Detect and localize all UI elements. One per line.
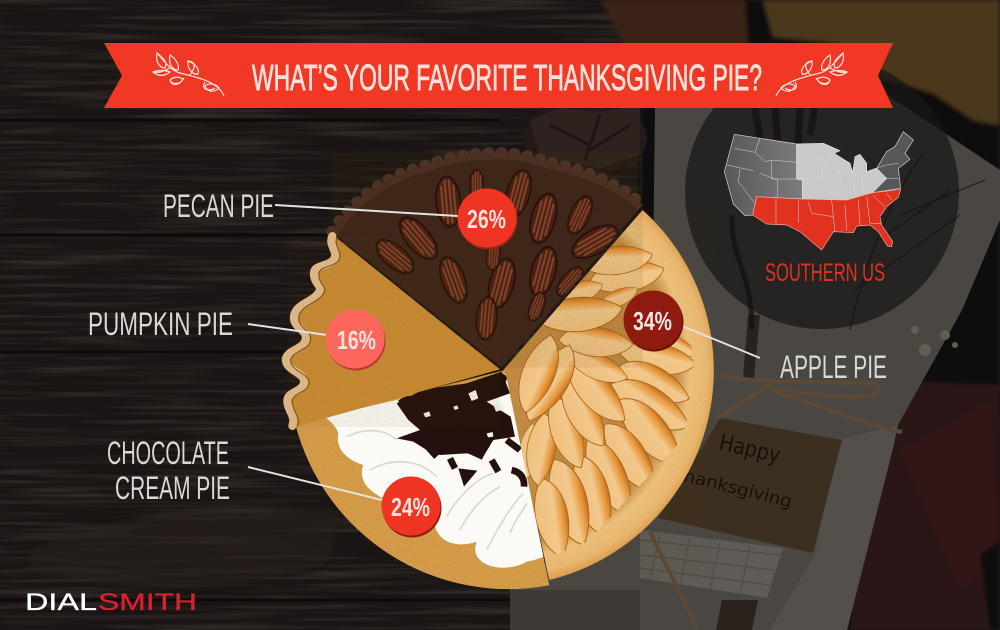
twine bow <box>650 375 902 628</box>
gift tag: Thanksgiving <box>670 463 794 512</box>
fork and dried flowers <box>732 108 985 330</box>
badge: 34%: 34% <box>633 306 672 336</box>
badge: 24%: 24% <box>391 492 430 522</box>
badge: 26%: 26% <box>467 204 506 234</box>
map label: SOUTHERN US <box>765 259 885 287</box>
stick <box>716 315 760 630</box>
label: pecan pie: PECAN PIE <box>163 188 274 224</box>
label: chocolate cream pie: CHOCOLATE <box>107 435 229 471</box>
pie graphic <box>286 153 714 589</box>
whipped cream <box>325 373 557 568</box>
southern region <box>753 189 901 250</box>
dark circle <box>685 55 959 329</box>
northeast region <box>873 132 913 193</box>
badge: 16%: 16% <box>337 325 376 355</box>
badge: 16% <box>326 310 386 370</box>
gift tag: Happy <box>717 430 783 469</box>
label: chocolate cream pie: CREAM PIE <box>115 470 230 506</box>
title banner <box>104 43 893 108</box>
badge: 34% <box>624 290 684 352</box>
label: pumpkin pie: PUMPKIN PIE <box>88 306 233 342</box>
badge: 24% <box>382 476 442 538</box>
slice: apple pie <box>503 210 714 580</box>
slice: pumpkin pie <box>286 236 500 427</box>
leader lines <box>248 205 760 500</box>
label: chocolate cream pie <box>107 435 230 506</box>
slice: chocolate cream pie <box>295 370 557 589</box>
west region <box>724 134 802 216</box>
state lines <box>727 138 898 232</box>
background: autumn leaves <box>600 0 1000 630</box>
burlap cloth <box>640 530 783 598</box>
ribbon <box>104 43 893 108</box>
chocolate curls <box>397 372 515 457</box>
gift tag <box>658 418 842 553</box>
midwest region <box>797 143 887 200</box>
icon: left sprig <box>153 53 224 96</box>
flower sprigs <box>911 326 958 356</box>
pine cone <box>523 100 647 176</box>
logo: Dialsmith: SMITH <box>98 589 197 616</box>
icon: right sprig <box>776 53 847 96</box>
logo: Dialsmith: DIAL <box>25 589 97 616</box>
logo: Dialsmith <box>25 589 197 616</box>
map of the United States <box>724 132 913 250</box>
slice: pecan pie <box>332 153 643 367</box>
label: apple pie: APPLE PIE <box>780 349 887 385</box>
napkin <box>510 90 1000 630</box>
map callout: Southern US <box>685 55 985 356</box>
badge: 26% <box>458 188 518 250</box>
